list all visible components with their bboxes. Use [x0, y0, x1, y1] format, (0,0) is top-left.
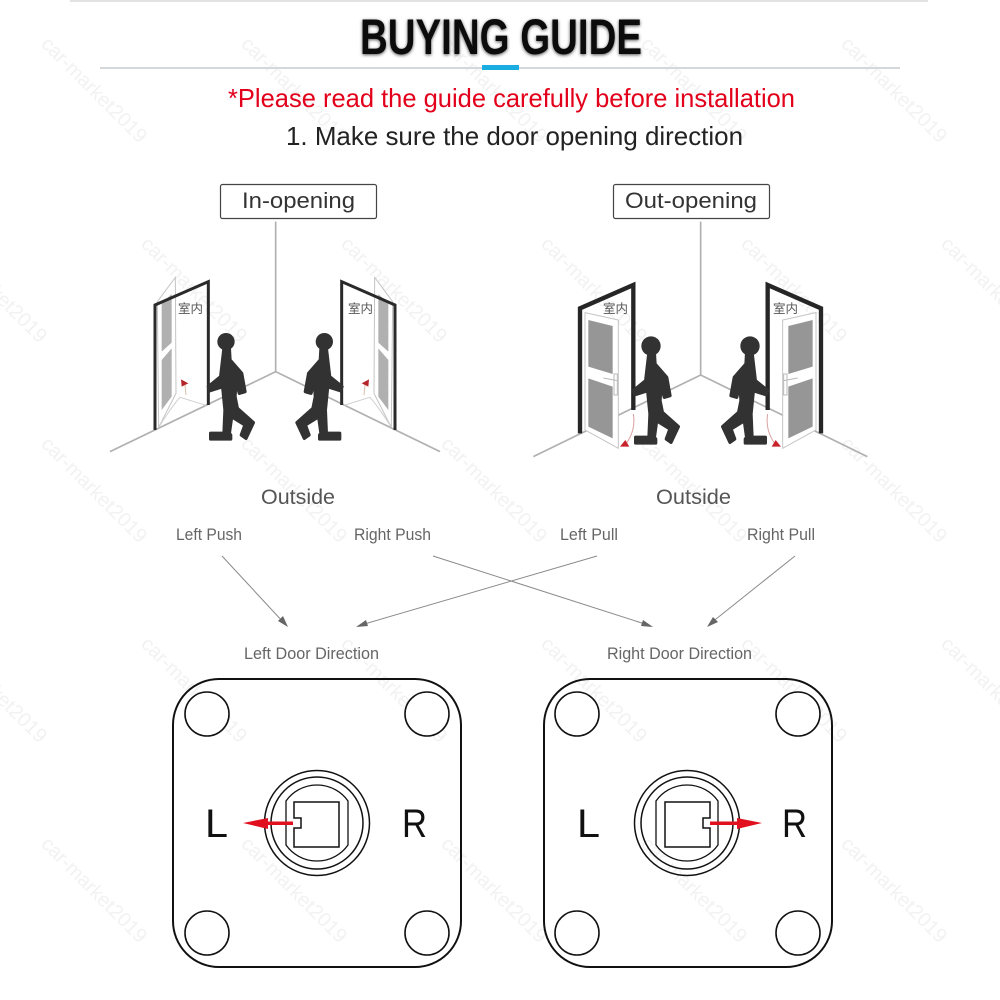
watermark pattern: car-market2019	[636, 433, 751, 548]
watermark pattern: car-market2019	[836, 33, 951, 148]
label: right door direction: Right Door Direction	[607, 644, 752, 663]
illustration: in-opening doors: 室内	[178, 301, 203, 316]
label: right push: Right Push	[354, 525, 431, 544]
letter R: R	[782, 802, 807, 846]
step heading: 1. Make sure the door opening direction	[286, 121, 743, 151]
watermark pattern: car-market2019	[736, 233, 851, 348]
illustration: out-opening doors: 室内	[603, 301, 628, 316]
label: in-opening	[220, 184, 376, 218]
watermark pattern: car-market2019	[536, 633, 651, 748]
watermark pattern: car-market2019	[336, 633, 451, 748]
label: out-opening: Out-opening	[625, 188, 757, 213]
label: out-opening	[614, 184, 770, 218]
illustration: in-opening doors: 室内	[348, 301, 373, 316]
red arrow pointing left	[243, 818, 293, 829]
illustration: out-opening doors: 室内	[773, 301, 798, 316]
label: left push: Left Push	[176, 525, 242, 544]
arrow: left push to left door	[222, 556, 288, 627]
letter L: L	[577, 802, 600, 846]
lock plate: right door	[544, 679, 832, 967]
outside label right: Outside	[656, 486, 731, 509]
watermark pattern: car-market2019	[236, 433, 351, 548]
arrow: right push to right door	[433, 556, 653, 627]
watermark pattern: car-market2019	[836, 433, 951, 548]
label: left door direction: Left Door Direction	[244, 644, 379, 663]
red notice: *Please read the guide carefully before installation	[228, 83, 795, 113]
watermark pattern: car-market2019	[436, 433, 551, 548]
watermark pattern: car-market2019	[236, 833, 351, 948]
watermark pattern: car-market2019	[36, 433, 151, 548]
label: left pull: Left Pull	[560, 525, 618, 544]
header rule with blue accent	[100, 65, 900, 70]
red arrow pointing right	[710, 818, 762, 829]
watermark pattern: car-market2019	[236, 33, 351, 148]
letter R: R	[402, 802, 427, 846]
watermark pattern: car-market2019	[136, 233, 251, 348]
title: BUYING GUIDE	[360, 9, 642, 65]
illustration: out-opening doors	[533, 222, 867, 457]
watermark pattern: car-market2019	[336, 233, 451, 348]
letter L: L	[205, 802, 228, 846]
outside label left: Outside	[261, 486, 335, 509]
watermark pattern: car-market2019	[436, 833, 551, 948]
label: in-opening: In-opening	[242, 188, 355, 213]
arrow: left pull to left door	[356, 556, 597, 627]
lock plate: left door	[173, 679, 461, 967]
watermark pattern: car-market2019	[36, 833, 151, 948]
label: right pull: Right Pull	[747, 525, 815, 544]
watermark pattern: car-market2019	[636, 33, 751, 148]
watermark pattern: car-market2019	[836, 833, 951, 948]
watermark pattern: car-market2019	[636, 833, 751, 948]
watermark pattern: car-market2019	[136, 633, 251, 748]
illustration: in-opening doors	[110, 222, 440, 452]
arrow: right pull to right door	[707, 556, 795, 627]
title: BUYING GUIDE	[360, 10, 642, 66]
watermark pattern: car-market2019	[736, 633, 851, 748]
watermark pattern: car-market2019	[536, 233, 651, 348]
watermark pattern: car-market2019	[36, 33, 151, 148]
watermark pattern: car-market2019	[436, 33, 551, 148]
top border line	[70, 0, 928, 2]
